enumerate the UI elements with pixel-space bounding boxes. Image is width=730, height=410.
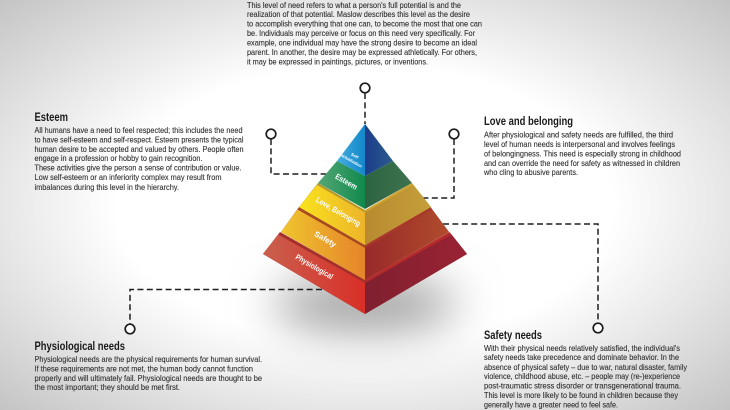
- pyramid: [263, 124, 467, 314]
- connector: physiological: [125, 290, 322, 334]
- text block: safety needs: With their physical needs relatively satisfied, the individual's: [484, 344, 680, 353]
- text block: safety needs: Safety needs: [484, 330, 542, 342]
- layer: love and belonging: [299, 183, 431, 245]
- layer: esteem: [318, 161, 412, 209]
- text block: physiological needs: [34, 341, 263, 392]
- text block: esteem: imbalances during this level in the hierarchy.: [34, 183, 179, 192]
- connector: love and belonging: [423, 129, 459, 198]
- text block: esteem: human desire to be accepted and valued by others. People often: [34, 145, 244, 154]
- text block: safety needs: post-traumatic stress disorder or transgenerational trauma.: [484, 382, 681, 390]
- text block: self-actualization: it may be expressed in paintings, pictures, or inventions.: [247, 58, 428, 66]
- text block: self-actualization: example, one individual may have the strong desire to become an ideal: [247, 38, 477, 48]
- text block: self-actualization: to accomplish everything that one can, to become the most that one can: [247, 20, 482, 28]
- text block: safety needs: absence of physical safety – due to war, natural disaster, family: [484, 363, 687, 372]
- text block: physiological needs: properly and will ultimately fail. Physiological needs are thought to be: [34, 374, 263, 383]
- text block: safety needs: This level is more likely to be found in children because they: [484, 391, 678, 400]
- layer: esteem: Esteem: [334, 172, 359, 192]
- text block: esteem: engage in a profession or hobby to gain recognition.: [34, 154, 202, 163]
- layer: self-actualization: Self: [350, 152, 360, 160]
- text block: esteem: [34, 112, 244, 192]
- text block: safety needs: [484, 330, 687, 410]
- text block: physiological needs: the most important; they should be met first.: [34, 383, 180, 392]
- text block: love and belonging: [483, 116, 681, 177]
- connector: esteem: [266, 129, 326, 174]
- text block: self-actualization: [247, 1, 482, 66]
- text block: self-actualization: This level of need refers to what a person's full potential is and the: [247, 1, 461, 10]
- text block: safety needs: safety needs take precedence and dominate behavior. In the: [484, 353, 679, 362]
- text block: love and belonging: Love and belonging: [484, 116, 573, 128]
- text block: love and belonging: who cling to abusive parents.: [483, 168, 578, 177]
- layer: self-actualization: actualization: [341, 153, 363, 169]
- text block: love and belonging: and can override the need for safety as witnessed in children: [484, 159, 680, 168]
- layer: safety: Safety: [313, 229, 338, 250]
- text block: esteem: All humans have a need to feel respected; this includes the need: [34, 126, 242, 135]
- text block: physiological needs: Physiological needs are the physical requirements for human survival.: [34, 355, 262, 364]
- text block: esteem: Esteem: [34, 112, 68, 124]
- connector: safety: [443, 224, 603, 333]
- text block: love and belonging: of belongingness. This need is especially strong in childhood: [484, 150, 681, 158]
- layer: safety: [281, 207, 449, 280]
- connector: self-actualization: [360, 83, 370, 124]
- text block: esteem: to have self-esteem and self-respect. Esteem presents the typical: [34, 136, 244, 144]
- layer: love and belonging: Love, Belonging: [314, 195, 362, 228]
- text block: safety needs: generally have a greater need to feel safe.: [484, 400, 618, 410]
- layer: self-actualization: [337, 124, 393, 176]
- text block: esteem: Low self-esteem or an inferiority complex may result from: [34, 173, 222, 182]
- text block: self-actualization: realization of that potential. Maslow describes this level as the desire: [247, 10, 471, 19]
- pyramid shadow: [273, 277, 457, 333]
- layer: physiological: [263, 232, 467, 314]
- text block: self-actualization: parent. In another, the desire may be expressed athletically. For others,: [247, 48, 477, 57]
- text block: self-actualization: be. Individuals may perceive or focus on this need very specifically. For: [247, 29, 475, 38]
- text block: love and belonging: level of human needs is interpersonal and involves feelings: [484, 140, 675, 149]
- layer: physiological: Physiological: [294, 252, 335, 281]
- text block: love and belonging: After physiological and safety needs are fulfilled, the third: [484, 130, 673, 140]
- text block: physiological needs: Physiological needs: [34, 341, 125, 353]
- text block: esteem: These activities give the person a sense of contribution or value.: [34, 164, 242, 172]
- text block: safety needs: violence, childhood abuse, etc. – people may (re-)experience: [484, 372, 680, 381]
- text block: physiological needs: If these requirements are not met, the human body cannot function: [34, 364, 253, 374]
